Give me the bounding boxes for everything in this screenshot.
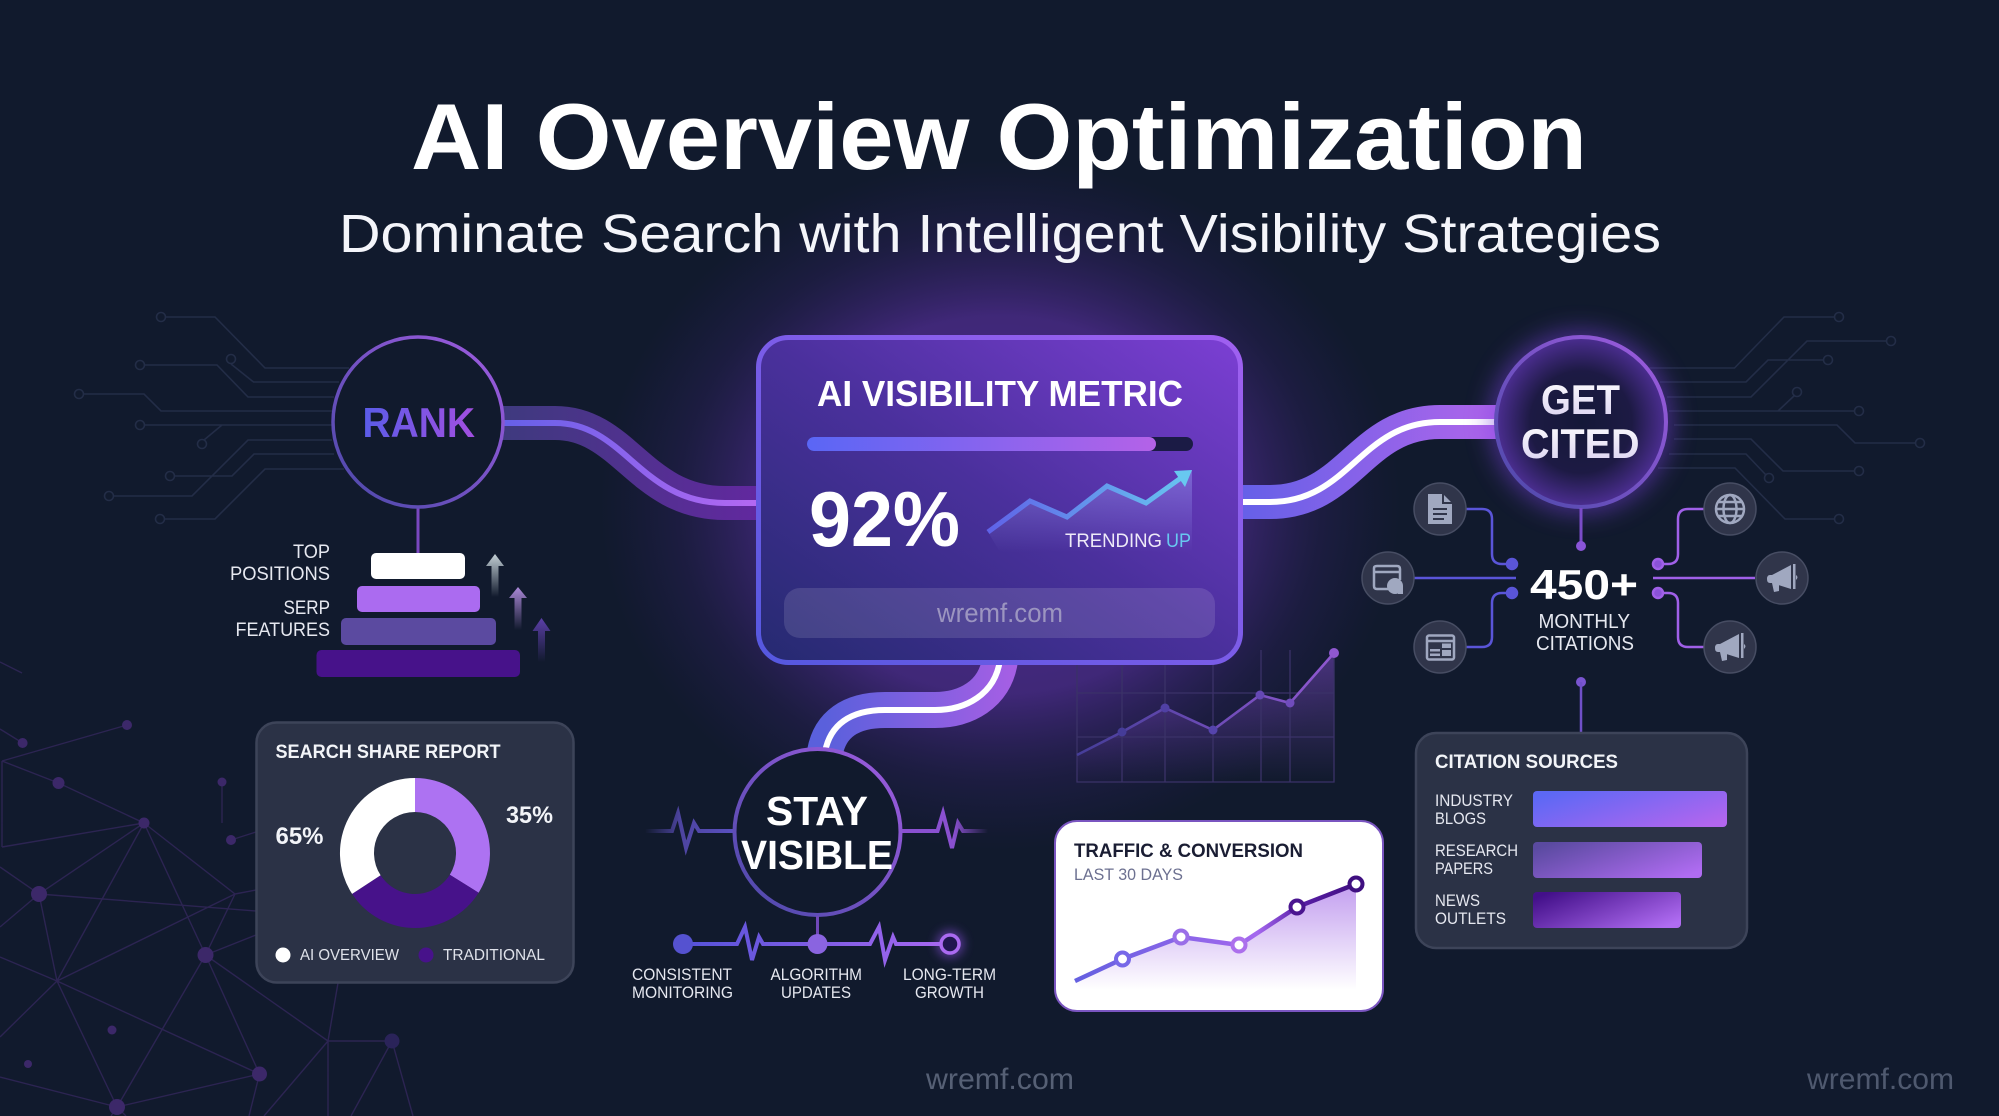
watermark: right: wremf.com [1806,1063,1954,1096]
trend chart [988,470,1192,552]
circuit decoration: right [1649,312,1924,524]
node: get cited [1489,330,1673,514]
circuit decoration: left [74,312,349,524]
donut chart [340,778,490,928]
citations figure: 450+ [1530,561,1638,608]
node: get cited: GET [1541,376,1620,423]
traffic heading: TRAFFIC & CONVERSION [1074,841,1303,862]
citation sources heading: CITATION SOURCES [1435,752,1618,773]
icon: megaphone [1756,552,1808,604]
title: AI Overview Optimization [411,84,1587,189]
timeline labels: GROWTH [915,983,984,1002]
metric value: 92% [809,475,960,563]
node: stay visible: VISIBLE [741,832,893,878]
watermark pill: wremf.com [936,598,1063,628]
icon: document [1414,483,1466,535]
node: get cited: CITED [1521,420,1640,467]
node: rank: RANK [362,399,475,446]
icon: globe [1704,483,1756,535]
source labels: NEWS [1435,891,1480,910]
pyramid labels: TOP [293,542,330,563]
source labels: INDUSTRY [1435,791,1513,810]
timeline labels: CONSISTENT [632,965,732,984]
timeline labels [632,965,996,1002]
citations caption [1536,611,1634,655]
icon: megaphone small [1704,621,1756,673]
donut value: 35 percent: 35% [506,802,553,829]
trending label: UP [1166,531,1191,552]
ribbon: metric to get cited [1238,422,1500,502]
connector: get cited to citations [1576,508,1586,551]
panel: search share report [256,722,574,982]
timeline labels: LONG-TERM [903,965,996,984]
source labels: PAPERS [1435,859,1493,878]
timeline labels: UPDATES [781,983,851,1002]
source labels: RESEARCH [1435,841,1518,860]
ribbon: rank to metric [500,423,762,503]
panel: traffic and conversion [1055,821,1383,1011]
source bars [1533,791,1727,928]
background line chart [1077,648,1339,782]
area line chart [1075,878,1362,990]
icon: browser chat [1362,552,1414,604]
source labels: OUTLETS [1435,909,1506,928]
subtitle: Dominate Search with Intelligent Visibility Strategies [339,204,1661,264]
timeline labels: ALGORITHM [770,965,862,984]
progress bar [807,437,1193,451]
connectors: right citation sources [1653,509,1755,647]
pyramid: ranking tiers [316,553,520,677]
traffic subheading: LAST 30 DAYS [1074,866,1183,884]
connectors: left citation sources [1414,509,1517,647]
connector: citations to sources [1576,677,1586,732]
search share heading: SEARCH SHARE REPORT [276,742,501,763]
pyramid labels [230,542,330,641]
watermark: center: wremf.com [925,1063,1074,1096]
watermark pill [784,588,1215,638]
ribbon: metric to stay visible [825,660,1000,752]
icon: newspaper window [1414,621,1466,673]
pyramid labels: FEATURES [236,620,330,641]
arrow: second tier [509,587,527,630]
citations caption: CITATIONS [1536,633,1634,655]
donut value: 65 percent: 65% [276,823,324,850]
panel: AI visibility metric [758,338,1240,662]
citations caption: MONTHLY [1538,611,1630,633]
arrow: top tier [486,554,504,597]
panel: citation sources [1416,733,1747,948]
timeline labels: MONITORING [632,983,733,1002]
source labels: BLOGS [1435,809,1486,828]
metric heading: AI VISIBILITY METRIC [817,373,1183,414]
legend [276,947,545,964]
node: rank [333,337,503,553]
legend: TRADITIONAL [443,947,545,964]
pyramid labels: POSITIONS [230,564,330,585]
source labels [1435,791,1518,928]
network decoration: bottom left [0,662,413,1116]
pyramid labels: SERP [284,598,330,619]
node: stay visible: STAY [766,788,868,834]
trending label: TRENDING [1065,531,1162,552]
arrow: third tier [532,618,550,662]
legend: AI OVERVIEW [300,947,400,964]
timeline [673,916,964,960]
node: stay visible [645,749,988,915]
